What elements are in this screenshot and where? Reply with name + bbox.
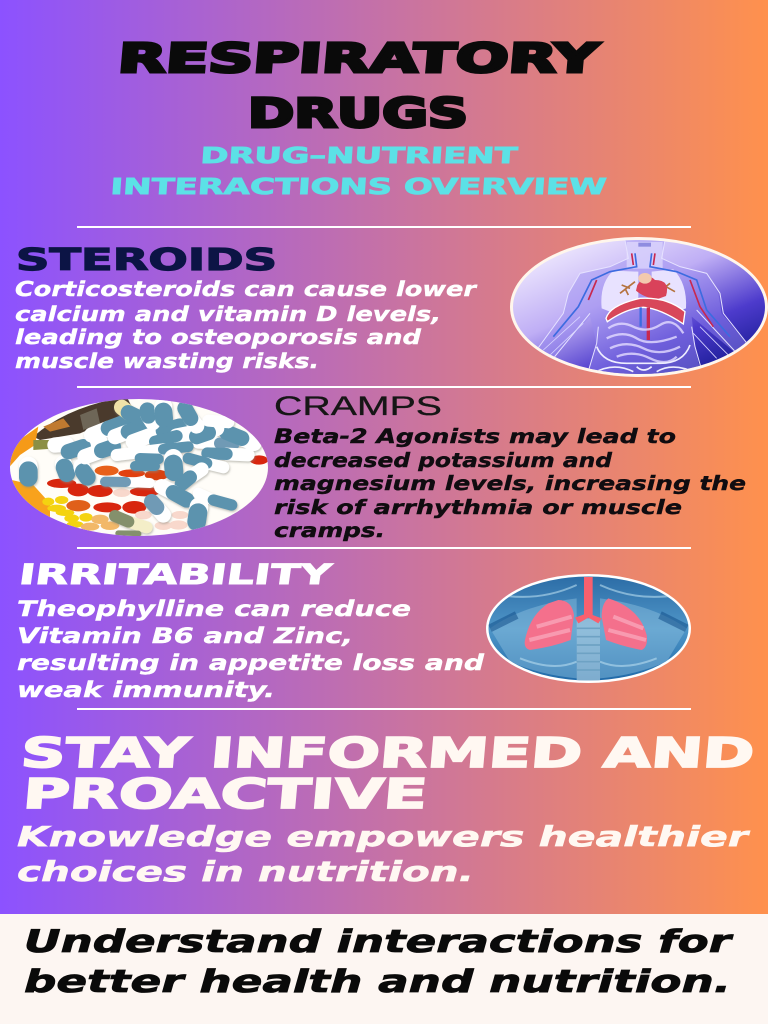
text: steroids description: leading to osteoporosis and [15, 325, 421, 349]
pelvis [593, 345, 697, 373]
heading: steroids: STEROIDS [16, 243, 277, 278]
text: cramps description: cramps. [274, 519, 385, 542]
trachea [575, 577, 602, 623]
pale tablets [113, 488, 188, 530]
intestines [607, 322, 683, 362]
peach tablets [81, 515, 119, 531]
heading: stay informed and proactive [19, 729, 756, 818]
subtitle: DRUG–NUTRIENT [200, 144, 518, 169]
title [116, 36, 602, 137]
text: steroids description: muscle wasting risks. [15, 349, 319, 373]
title: RESPIRATORY [116, 36, 602, 82]
footer text: Understand interactions for [24, 924, 733, 960]
blue and white capsules [28, 407, 254, 534]
text: knowledge empowers: choices in nutrition. [17, 855, 474, 888]
footer text [24, 924, 733, 1000]
subtitle [110, 144, 607, 200]
panel: cramps [7, 391, 746, 542]
text: steroids description [15, 277, 478, 373]
subtitle: INTERACTIONS OVERVIEW [110, 175, 607, 200]
aorta [646, 307, 650, 340]
text: cramps description: Beta-2 Agonists may lead to [274, 425, 676, 448]
bottle and orange shapes [36, 399, 131, 440]
rib highlights [529, 617, 646, 640]
red tablets [47, 455, 268, 514]
heart [636, 277, 667, 299]
text: cramps description: magnesium levels, increasing the [274, 472, 746, 495]
lungs [601, 271, 638, 312]
right lung [602, 598, 647, 650]
text: knowledge empowers: Knowledge empowers healthier [17, 820, 751, 853]
text: cramps description [274, 425, 746, 542]
text: cramps description: decreased potassium and [274, 449, 613, 472]
diaphragm [606, 298, 685, 324]
heading: irritability: IRRITABILITY [17, 558, 335, 591]
heading: cramps: CRAMPS [274, 391, 442, 421]
text: irritability description: Theophylline can reduce [17, 597, 411, 621]
panel: steroids [15, 232, 768, 382]
text: knowledge empowers [17, 820, 751, 888]
panel: irritability [17, 558, 693, 702]
footer panel [0, 914, 768, 1024]
image: lungs x-ray [485, 573, 693, 685]
heading: stay informed and proactive: STAY INFORMED AND [19, 729, 756, 777]
heading: stay informed and proactive: PROACTIVE [21, 770, 429, 818]
torso highlights [490, 598, 577, 678]
text: steroids description: Corticosteroids can cause lower [15, 277, 478, 301]
image: human torso anatomy [505, 232, 768, 382]
body silhouette [537, 240, 748, 377]
text: steroids description: calcium and vitamin D levels, [15, 302, 441, 326]
footer text: better health and nutrition. [24, 964, 731, 1000]
text: irritability description [17, 597, 485, 702]
text: irritability description: weak immunity. [17, 678, 275, 702]
left lung [525, 600, 574, 650]
title: DRUGS [248, 91, 468, 137]
image: assorted pills [7, 397, 268, 536]
text: irritability description: Vitamin B6 and Zinc, [17, 624, 353, 648]
text: cramps description: risk of arrhythmia or muscle [274, 496, 682, 519]
text: irritability description: resulting in appetite loss and [17, 651, 485, 675]
yellow tablets [42, 496, 93, 528]
spine [577, 618, 600, 682]
veins [553, 253, 637, 337]
